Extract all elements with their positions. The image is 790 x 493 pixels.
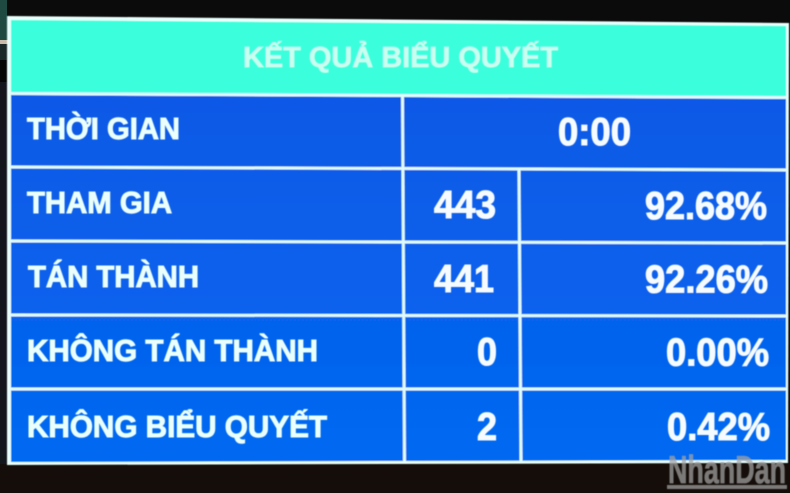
row: không tán thành: KHÔNG TÁN THÀNH (27, 332, 318, 368)
row: thời gian: THỜI GIAN (27, 110, 180, 146)
panel: table cell background (11, 95, 786, 462)
row: không biểu quyết: 2 (477, 406, 497, 449)
row: tham gia: 92.68% (645, 185, 767, 228)
row: tham gia: 443 (434, 184, 496, 227)
row: tán thành: 441 (434, 258, 494, 301)
row: tán thành: TÁN THÀNH (28, 259, 199, 294)
row: không biểu quyết: 0.42% (667, 406, 770, 449)
panel: header band (11, 20, 786, 96)
row: tán thành: 92.26% (645, 258, 768, 302)
row: không tán thành: 0.00% (666, 332, 769, 374)
row: tham gia: THAM GIA (27, 185, 172, 220)
row: không tán thành: 0 (477, 331, 497, 374)
row: tán thành (28, 258, 768, 302)
row: thời gian (27, 110, 631, 154)
table text (27, 110, 770, 449)
icon: dark clip at left edge (0, 60, 12, 82)
grid lines (10, 94, 787, 462)
row: thời gian: 0:00 (558, 111, 631, 154)
title: KẾT QUẢ BIỂU QUYẾT (243, 40, 558, 74)
row: không tán thành (27, 331, 769, 374)
row: không biểu quyết: KHÔNG BIỂU QUYẾT (27, 408, 327, 444)
row: tham gia (27, 184, 767, 228)
row: không biểu quyết (27, 406, 770, 449)
